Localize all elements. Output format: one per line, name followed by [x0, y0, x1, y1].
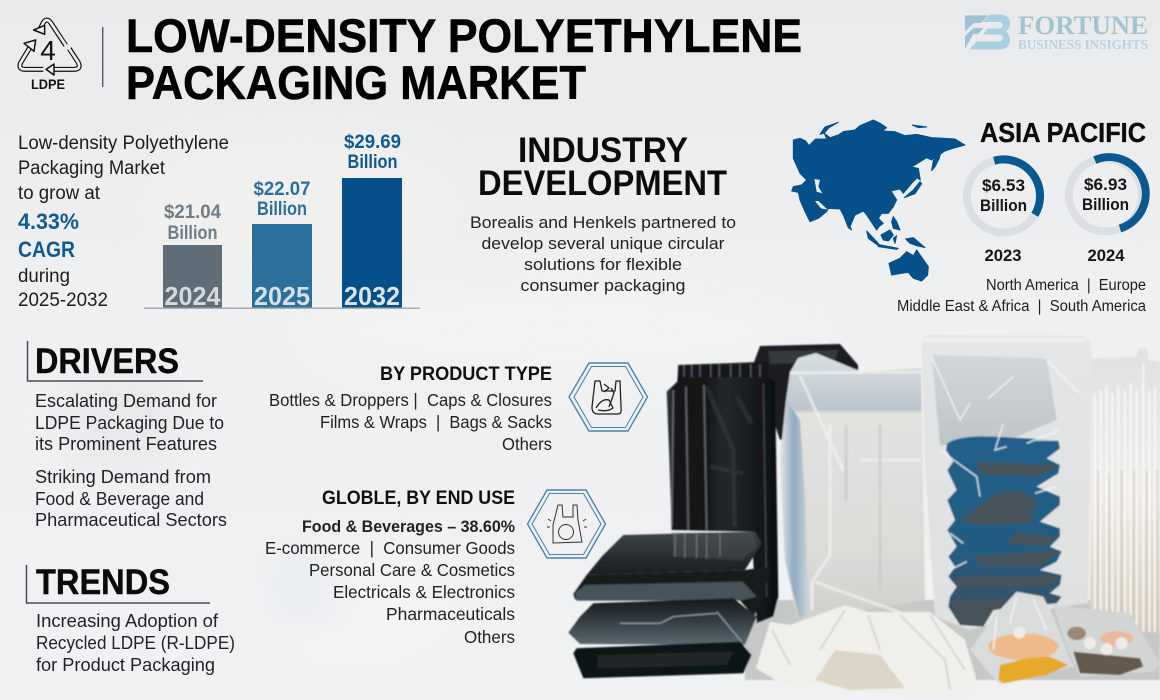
- text block: other regions: North America | Europe: [986, 277, 1146, 294]
- panel: global by end use: Food & Beverages – 38.60%: [302, 518, 515, 536]
- white crumpled film: [756, 605, 976, 698]
- panel: by product type: BY PRODUCT TYPE: [380, 364, 552, 385]
- icon: LDPE recycling symbol: LDPE: [31, 76, 65, 92]
- donut: 2023: $6.53: [982, 176, 1025, 195]
- panel: drivers: Pharmaceutical Sectors: [35, 510, 227, 530]
- donut: 2024: $6.93: [1084, 175, 1127, 194]
- icon: hexagon with bag and bottles: [569, 363, 648, 431]
- panel: global by end use: Others: [464, 627, 515, 647]
- panel: by product type: [269, 364, 552, 454]
- icon: FB mark: [965, 15, 1010, 49]
- clear bag: [780, 353, 925, 622]
- bar: 2032: $29.69: [344, 132, 401, 153]
- icon: LDPE recycling symbol: [20, 20, 79, 92]
- panel: global by end use: GLOBLE, BY END USE: [322, 488, 515, 509]
- bar: 2032: Billion: [348, 152, 398, 173]
- bar: 2025: $22.07: [254, 179, 310, 200]
- text block: market growth summary: Packaging Market: [18, 158, 166, 179]
- panel: trends: Increasing Adoption of: [36, 611, 219, 631]
- white stacked film: [1090, 348, 1160, 633]
- text block: market growth summary: CAGR: [18, 237, 75, 262]
- panel: trends: [26, 563, 235, 675]
- bar: 2025: Billion: [257, 199, 307, 220]
- bar: 2025: [252, 179, 312, 311]
- icon: hexagon with shopping bag: [528, 490, 606, 558]
- text block: market growth summary: during: [18, 266, 70, 287]
- panel: industry development: DEVELOPMENT: [478, 164, 727, 203]
- panel: drivers: Striking Demand from: [35, 467, 211, 487]
- logo: Fortune Business Insights: [965, 10, 1148, 52]
- panel: industry development: [470, 131, 736, 295]
- panel: global by end use: E-commerce | Consumer Goods: [265, 538, 515, 558]
- bar chart: market size: [144, 132, 420, 311]
- panel: industry development: INDUSTRY: [518, 131, 688, 170]
- donut: 2024: [1069, 157, 1146, 265]
- bar: 2025: 2025: [254, 281, 310, 311]
- panel: drivers: DRIVERS: [35, 342, 179, 381]
- clear bag with blue contents: [922, 335, 1092, 630]
- panel: drivers: Food & Beverage and: [35, 489, 204, 509]
- panel: global by end use: Personal Care & Cosmetics: [309, 560, 515, 580]
- title: PACKAGING MARKET: [126, 57, 586, 110]
- donut: 2024: Billion: [1082, 195, 1129, 214]
- panel: industry development: consumer packaging: [520, 276, 686, 295]
- photo: LDPE packaging products: [568, 335, 1160, 698]
- donut: 2023: Billion: [980, 196, 1027, 215]
- panel: industry development: Borealis and Henkels partnered to: [470, 213, 736, 232]
- map: Asia Pacific: [792, 120, 965, 281]
- text block: other regions: Middle East & Africa | South America: [897, 298, 1146, 315]
- bar: 2024: [163, 202, 222, 311]
- panel: Asia Pacific: ASIA PACIFIC: [980, 117, 1146, 148]
- title: LOW-DENSITY POLYETHYLENE: [126, 10, 802, 63]
- panel: by product type: Others: [502, 434, 552, 454]
- black stacked packs: [568, 532, 771, 678]
- title: [126, 10, 802, 110]
- bar: 2024: 2024: [164, 281, 221, 311]
- panel: industry development: solutions for flexible: [524, 255, 682, 274]
- panel: trends: Recycled LDPE (R-LDPE): [36, 633, 235, 653]
- panel: global by end use: Electricals & Electronics: [333, 582, 515, 602]
- panel: by product type: Bottles & Droppers | Caps & Closures: [269, 390, 552, 410]
- panel: trends: for Product Packaging: [36, 655, 215, 675]
- panel: drivers: its Prominent Features: [35, 434, 217, 454]
- panel: global by end use: [265, 488, 515, 647]
- logo: Fortune Business Insights: FORTUNE: [1018, 10, 1148, 40]
- bar: 2032: [342, 132, 402, 311]
- donut: 2023: [967, 159, 1040, 265]
- panel: drivers: Escalating Demand for: [35, 391, 217, 411]
- text block: market growth summary: 4.33%: [18, 209, 79, 234]
- panel: Asia Pacific: [897, 117, 1146, 315]
- small bags with pasta and caps: [970, 592, 1160, 684]
- panel: drivers: [28, 341, 227, 530]
- donut: 2024: 2024: [1088, 246, 1125, 265]
- panel: global by end use: Pharmaceuticals: [386, 604, 515, 624]
- text block: other regions: [897, 277, 1146, 315]
- text block: market growth summary: [18, 133, 229, 311]
- black bottle: [667, 362, 778, 623]
- panel: drivers: LDPE Packaging Due to: [35, 413, 224, 433]
- black box at back: [754, 344, 858, 440]
- text block: market growth summary: 2025-2032: [18, 290, 108, 311]
- bar: 2024: $21.04: [164, 202, 221, 223]
- text block: market growth summary: to grow at: [18, 183, 101, 204]
- logo: Fortune Business Insights: BUSINESS INSIGHTS: [1018, 37, 1148, 52]
- icon: LDPE recycling symbol: 4: [40, 35, 56, 66]
- bar: 2024: Billion: [168, 223, 218, 244]
- bar: 2032: 2032: [344, 281, 400, 311]
- text block: market growth summary: Low-density Polyethylene: [18, 133, 229, 154]
- panel: by product type: Films & Wraps | Bags & Sacks: [320, 412, 552, 432]
- panel: trends: TRENDS: [36, 563, 170, 602]
- donut: 2023: 2023: [984, 246, 1022, 265]
- panel: industry development: develop several unique circular: [482, 234, 725, 253]
